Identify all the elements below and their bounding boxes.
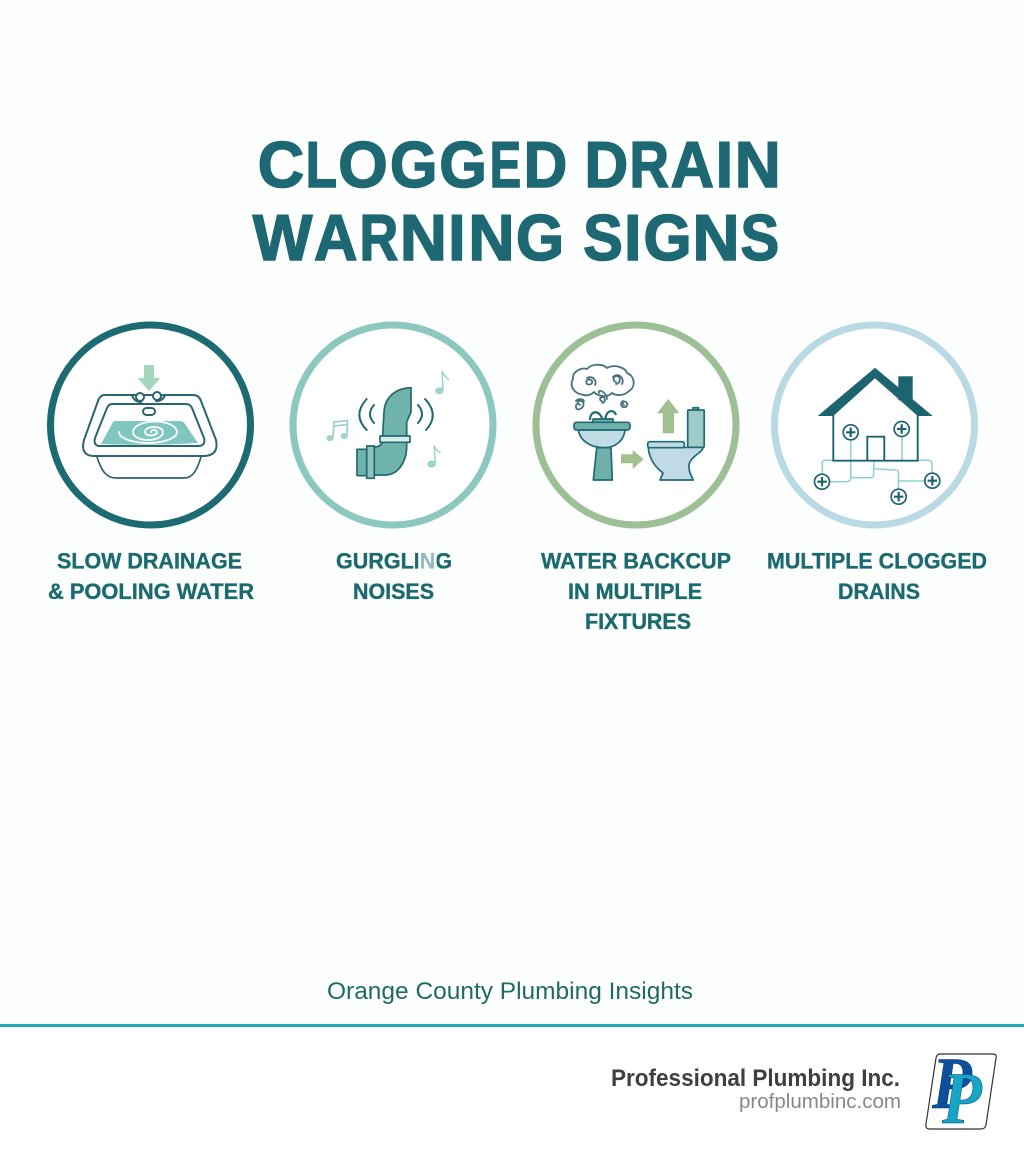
- panel: water backup: [536, 325, 736, 634]
- footer rule: [0, 1024, 1024, 1027]
- logo: P: [941, 1058, 983, 1140]
- title: R: [359, 201, 398, 274]
- title: G: [644, 201, 692, 274]
- label: water backup: FIXTURES: [585, 609, 691, 634]
- label: water backup: IN MULTIPLE: [568, 579, 702, 604]
- label: multiple clogged drains: MULTIPLE CLOGGED: [767, 548, 987, 574]
- title: I: [448, 201, 466, 274]
- label: water backup: WATER BACKCUP: [541, 548, 731, 574]
- arrow: up: [657, 399, 679, 433]
- panel: multiple clogged drains: [767, 325, 987, 604]
- label: gurgling noises: GURGLING: [336, 548, 452, 574]
- label: multiple clogged drains: DRAINS: [838, 579, 920, 604]
- title: I: [624, 201, 641, 274]
- panel: slow drainage: [48, 325, 254, 604]
- label: slow drainage: [48, 548, 254, 604]
- label: slow drainage: & POOLING WATER: [48, 579, 254, 604]
- title: G: [516, 201, 564, 274]
- footer tagline: Orange County Plumbing Insights: [327, 978, 693, 1005]
- icon ring: water backup: [536, 325, 736, 525]
- label: multiple clogged drains: [767, 548, 987, 604]
- title: N: [400, 201, 447, 274]
- title: R: [629, 128, 669, 201]
- icon: drain markers: [814, 422, 940, 504]
- title: D: [584, 128, 628, 201]
- icon ring: slow drainage: [50, 325, 250, 525]
- title: A: [314, 201, 358, 274]
- company name: Professional Plumbing Inc.: [611, 1065, 900, 1092]
- icon: toilet: [648, 408, 704, 480]
- label: slow drainage: SLOW DRAINAGE: [57, 548, 242, 574]
- logo: [926, 1043, 996, 1140]
- title: N: [692, 201, 740, 274]
- title: G: [390, 128, 437, 201]
- arrow: right: [621, 450, 644, 469]
- title: D: [524, 128, 567, 201]
- icon: house: [818, 368, 933, 461]
- title: A: [671, 128, 714, 201]
- icon: pedestal sink: [574, 411, 630, 480]
- icon: drain pipes: [822, 437, 932, 489]
- title: [253, 128, 781, 274]
- title: N: [468, 201, 515, 274]
- icon: music notes: [326, 371, 449, 468]
- title: N: [735, 128, 781, 201]
- logo: P: [931, 1043, 973, 1125]
- title: C: [258, 128, 304, 201]
- title: S: [741, 201, 779, 274]
- title: I: [716, 128, 733, 201]
- icon: sink with swirling water: [83, 365, 217, 478]
- icon ring: gurgling noises: [293, 325, 493, 525]
- title: G: [439, 128, 487, 201]
- title: O: [338, 128, 388, 201]
- company website: profplumbinc.com: [739, 1091, 901, 1113]
- label: gurgling noises: [336, 548, 452, 604]
- label: water backup: [541, 548, 731, 634]
- title: E: [490, 128, 521, 201]
- title: L: [306, 128, 337, 201]
- icon ring: multiple clogged drains: [774, 325, 974, 525]
- title: S: [583, 201, 623, 274]
- icon: odor cloud: [572, 365, 634, 409]
- icon: gurgling pipe with sound waves: [357, 388, 433, 478]
- title: W: [253, 201, 313, 274]
- label: gurgling noises: NOISES: [353, 579, 434, 604]
- panel: gurgling noises: [293, 325, 493, 604]
